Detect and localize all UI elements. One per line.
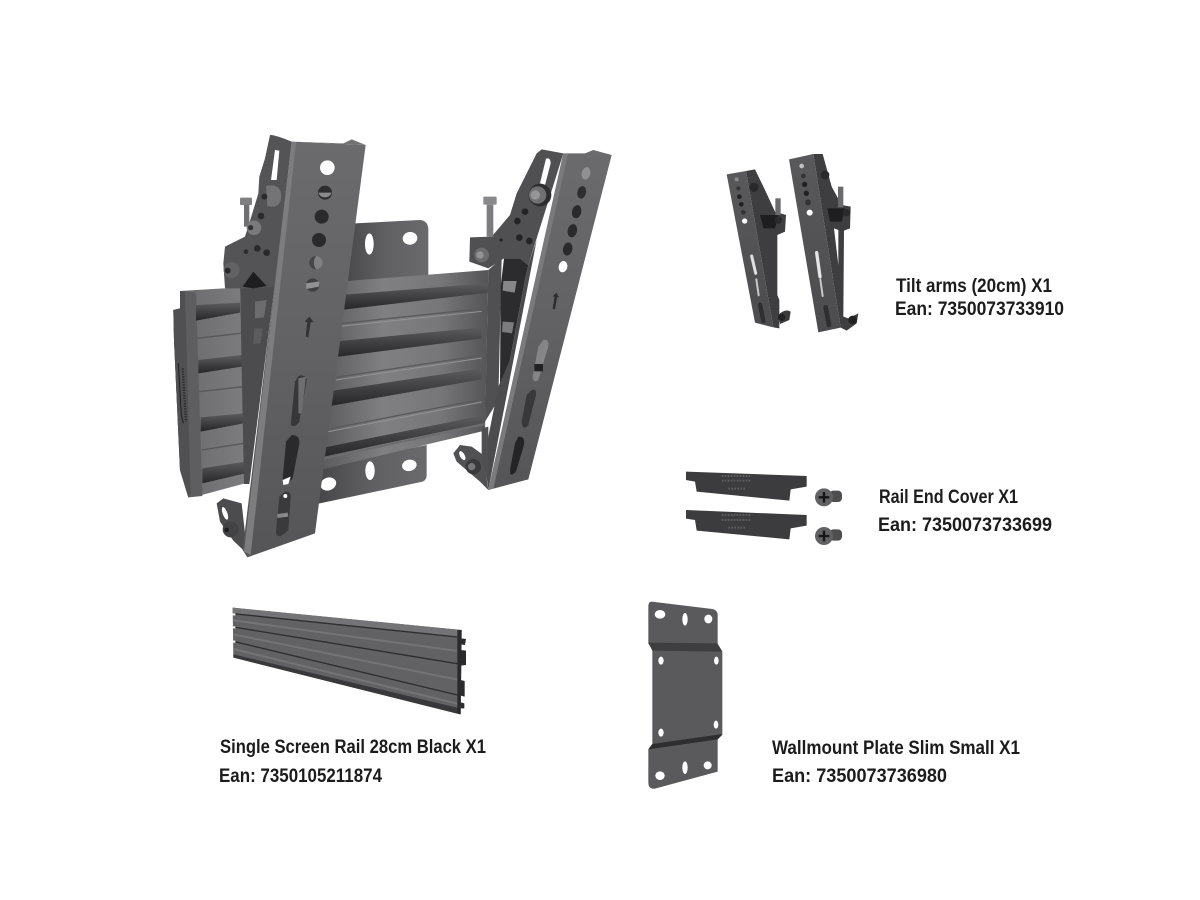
right tilt arm side plate xyxy=(453,149,563,490)
label: rail end cover xyxy=(878,487,1052,536)
cover 1 xyxy=(686,472,807,501)
label: tilt arms: Ean: 7350073733910 xyxy=(895,299,1064,320)
main product: assembled tilt mount xyxy=(173,135,612,557)
right arm xyxy=(789,154,858,332)
wall plate top xyxy=(342,220,428,285)
wallmount plate xyxy=(648,602,722,789)
tilt arms image xyxy=(727,154,858,332)
rail end covers and screws xyxy=(686,472,842,545)
cover 2 xyxy=(686,510,807,539)
screw 1 xyxy=(815,488,842,506)
screen rail centre section xyxy=(317,270,488,471)
single screen rail xyxy=(232,608,466,714)
left tilt arm side plate xyxy=(217,135,292,554)
arrow mark xyxy=(305,317,313,337)
screw 2 xyxy=(815,527,842,545)
label: rail end cover: Rail End Cover X1 xyxy=(879,487,1018,508)
left arm xyxy=(727,169,791,328)
arrow mark xyxy=(553,293,559,309)
label: tilt arms xyxy=(895,276,1064,320)
label: single screen rail: Single Screen Rail 28cm Black X1 xyxy=(220,737,486,758)
right tilt arm front face xyxy=(488,150,612,490)
label: single screen rail: Ean: 7350105211874 xyxy=(219,766,382,787)
right end of rail and window xyxy=(485,258,528,422)
label: rail end cover: Ean: 7350073733699 xyxy=(878,515,1052,536)
wall plate bottom xyxy=(317,445,427,504)
label: tilt arms: Tilt arms (20cm) X1 xyxy=(896,276,1052,297)
label: wallmount plate xyxy=(772,738,1020,787)
label: wallmount plate: Ean: 7350073736980 xyxy=(772,766,947,787)
label: single screen rail xyxy=(219,737,486,787)
screen rail left section with end cover xyxy=(173,283,275,497)
label: wallmount plate: Wallmount Plate Slim Small X1 xyxy=(772,738,1020,759)
left tilt arm front face xyxy=(243,139,366,557)
